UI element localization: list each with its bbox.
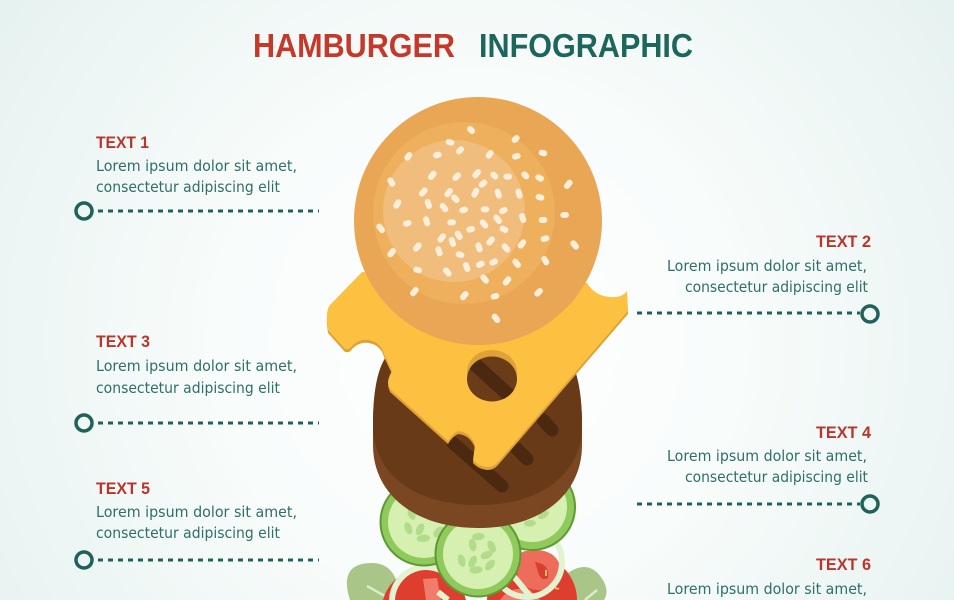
callout: text 1: consectetur adipiscing elit: [96, 178, 280, 196]
top bun: [354, 97, 602, 345]
lettuce: [347, 563, 606, 600]
tomato slices: [383, 550, 577, 600]
callout: text 5: consectetur adipiscing elit: [96, 524, 280, 542]
callout: text 6: [667, 555, 871, 598]
callout: text 2: consectetur adipiscing elit: [685, 278, 868, 296]
cucumber slice centre: [434, 510, 522, 598]
callout: text 5: Lorem ipsum dolor sit amet,: [96, 503, 297, 521]
title: HAMBURGER: [253, 27, 455, 64]
callout: text 5: TEXT 5: [96, 479, 150, 498]
callout: text 2: TEXT 2: [816, 232, 871, 251]
callout: text 4: [637, 423, 878, 512]
sesame seeds: [379, 129, 576, 320]
callout: text 4: consectetur adipiscing elit: [685, 468, 868, 486]
infographic canvas: [74, 34, 880, 600]
callout: text 3: Lorem ipsum dolor sit amet,: [96, 357, 297, 375]
callout: text 3: TEXT 3: [96, 332, 150, 351]
callout: text 5: [76, 479, 319, 568]
callout: text 1: TEXT 1: [96, 133, 149, 152]
callout: text 2: [637, 232, 878, 322]
callout: text 1: [76, 133, 319, 219]
callout: text 1: Lorem ipsum dolor sit amet,: [96, 157, 297, 175]
beef patty: [373, 352, 582, 528]
callout: text 2: Lorem ipsum dolor sit amet,: [667, 257, 867, 275]
cheese slice: [327, 272, 628, 470]
callout: text 3: [76, 332, 319, 431]
cucumber slice left: [380, 478, 468, 566]
callout: text 6: Lorem ipsum dolor sit amet,: [667, 580, 867, 598]
onion rings: [392, 527, 562, 600]
callout: text 4: TEXT 4: [816, 423, 872, 442]
title: [253, 27, 693, 64]
callout: text 6: TEXT 6: [816, 555, 871, 574]
cheese hole: [467, 350, 517, 402]
title: INFOGRAPHIC: [479, 27, 693, 64]
callout: text 3: consectetur adipiscing elit: [96, 379, 280, 397]
cucumber slice right: [488, 463, 576, 551]
callout: text 4: Lorem ipsum dolor sit amet,: [667, 447, 867, 465]
